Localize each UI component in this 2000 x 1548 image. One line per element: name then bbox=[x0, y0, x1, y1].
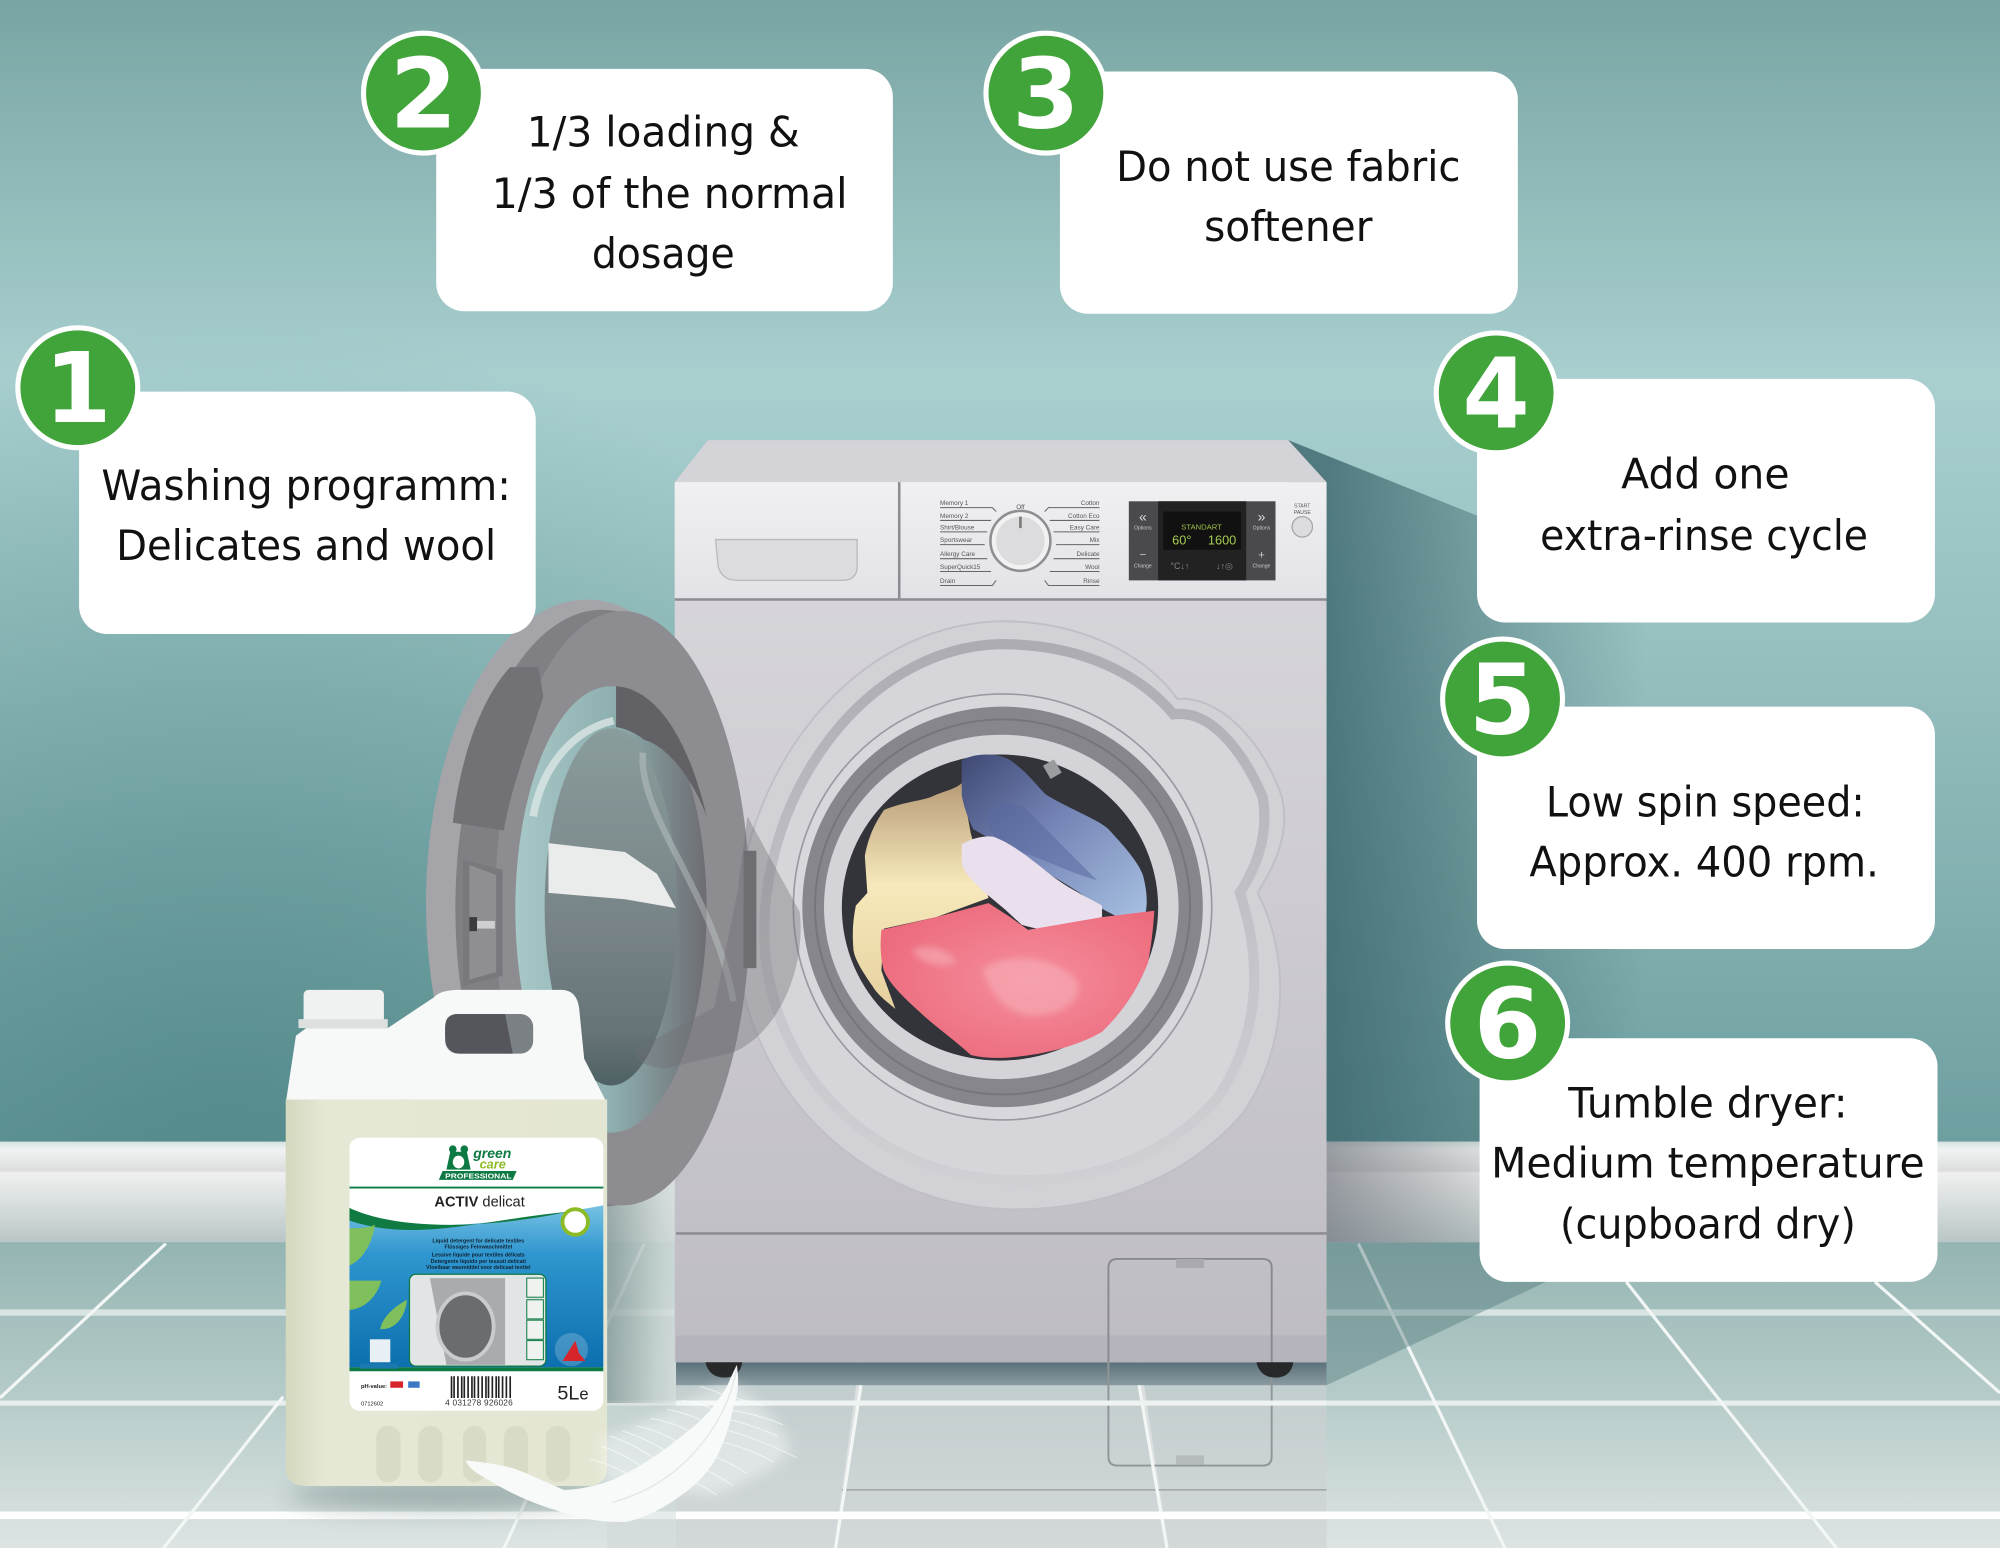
reflection column below door bbox=[607, 1173, 676, 1548]
barcode bbox=[445, 1376, 513, 1408]
feather bbox=[466, 1365, 797, 1522]
tiled floor bbox=[0, 1242, 2000, 1548]
washing machine bbox=[426, 440, 1327, 1548]
description lines: Vloeibaar wasmiddel voor delicaat textiel bbox=[426, 1265, 531, 1271]
programme labels left: Allergy Care bbox=[940, 551, 976, 558]
number badge: 1 bbox=[44, 332, 112, 445]
start pause button: START bbox=[1294, 504, 1310, 510]
description lines bbox=[426, 1238, 531, 1271]
text bbox=[1540, 450, 1868, 560]
jug body bbox=[286, 1100, 607, 1486]
description lines: Flüssiges Feinwaschmittel bbox=[444, 1245, 513, 1251]
machine shadow and reflection on floor bbox=[676, 1362, 1327, 1548]
product name: ACTIV delicat bbox=[434, 1195, 525, 1211]
description lines: Lessive liquide pour textiles délicats bbox=[432, 1252, 525, 1258]
number badge: 6 bbox=[1474, 967, 1541, 1080]
door hole bbox=[515, 686, 707, 1133]
blue garment fold bbox=[986, 803, 1097, 880]
brand mark bbox=[555, 1333, 588, 1366]
digital display: 60° bbox=[1172, 533, 1191, 548]
text: 1/3 loading & bbox=[527, 108, 800, 157]
service hatch bbox=[676, 1259, 1327, 1362]
callout 3: fabric softener bbox=[986, 33, 1518, 314]
programme labels left: SuperQuick15 bbox=[940, 564, 981, 571]
seal bbox=[562, 1209, 588, 1235]
text bbox=[492, 108, 848, 278]
embossed door surround bbox=[737, 621, 1284, 1209]
text: Add one bbox=[1621, 450, 1790, 499]
programme labels left: Memory 1 bbox=[940, 500, 969, 507]
leaves bbox=[349, 1225, 407, 1329]
cream garment bbox=[853, 783, 989, 1009]
lower recess with latch bbox=[463, 860, 503, 986]
text: Delicates and wool bbox=[116, 521, 496, 570]
digital display: ↓↑◎ bbox=[1216, 561, 1233, 571]
door glass bbox=[545, 728, 677, 1085]
brand logo: care bbox=[480, 1156, 506, 1171]
digital display: Options bbox=[1253, 525, 1271, 531]
programme labels left: Sportswear bbox=[940, 537, 973, 544]
text bbox=[101, 461, 511, 570]
start pause button bbox=[1292, 504, 1312, 537]
door bulge glass bbox=[636, 816, 801, 1069]
callout 6: tumble dryer bbox=[1448, 963, 1938, 1282]
text: softener bbox=[1204, 202, 1373, 251]
text: Do not use fabric bbox=[1116, 142, 1460, 191]
digital display: STANDART bbox=[1181, 522, 1222, 531]
skirting board bbox=[0, 1142, 2000, 1242]
programme labels left: Memory 2 bbox=[940, 513, 969, 520]
detergent drawer handle bbox=[716, 540, 857, 580]
article number: 0712602 bbox=[361, 1402, 383, 1408]
digital display: Change bbox=[1134, 564, 1152, 570]
garment highlights bbox=[912, 947, 1079, 1016]
jug shoulders and handle bbox=[286, 990, 607, 1103]
door back rim bbox=[426, 600, 747, 1207]
programme dial: Off bbox=[1016, 504, 1025, 511]
machine feet bbox=[705, 1362, 1293, 1378]
callout 2: loading and dosage bbox=[364, 33, 893, 311]
programme labels right: Mix bbox=[1090, 537, 1100, 544]
programme dial bbox=[990, 504, 1050, 571]
door latch strip bbox=[744, 851, 756, 968]
number badge bbox=[1436, 333, 1556, 453]
door front ring bbox=[455, 610, 749, 1207]
text: Low spin speed: bbox=[1546, 777, 1865, 826]
number badge: 3 bbox=[1012, 38, 1080, 151]
text: Tumble dryer: bbox=[1567, 1078, 1848, 1127]
brand logo: PROFESSIONAL bbox=[445, 1172, 512, 1181]
digital display: » bbox=[1258, 509, 1266, 525]
text: 1/3 of the normal bbox=[492, 169, 848, 218]
glass reflections bbox=[533, 721, 733, 1001]
programme labels right: Cotton bbox=[1081, 500, 1100, 507]
callout 1: washing programme bbox=[18, 328, 536, 634]
brand logo: green bbox=[472, 1145, 511, 1161]
control panel bbox=[675, 482, 1327, 600]
text: (cupboard dry) bbox=[1560, 1200, 1856, 1249]
blue label band bbox=[349, 1205, 603, 1367]
digital display: Change bbox=[1253, 564, 1271, 570]
door opening rings bbox=[793, 694, 1212, 1120]
barcode: 4 031278 926026 bbox=[445, 1398, 513, 1408]
jug cap bbox=[298, 990, 388, 1028]
text bbox=[1116, 142, 1460, 251]
open door bbox=[426, 600, 801, 1207]
programme labels right: Easy Care bbox=[1070, 524, 1100, 531]
pale pink garment bbox=[962, 836, 1102, 930]
wall shadow of washing machine bbox=[1288, 440, 1658, 1142]
number badge bbox=[18, 328, 138, 448]
digital display: °C↓↑ bbox=[1170, 561, 1189, 571]
programme labels right: Rinse bbox=[1083, 578, 1100, 585]
number badge: 4 bbox=[1462, 337, 1530, 450]
programme labels left: Drain bbox=[940, 578, 956, 585]
text: Medium temperature bbox=[1491, 1138, 1925, 1187]
callout 4: extra rinse bbox=[1436, 333, 1935, 622]
text: Washing programm: bbox=[101, 461, 511, 510]
description lines: Liquid detergent for delicate textiles bbox=[432, 1238, 524, 1244]
brand logo bbox=[439, 1145, 517, 1181]
detergent jug bbox=[286, 990, 607, 1510]
programme labels right: Cotton Eco bbox=[1068, 513, 1100, 520]
product label bbox=[349, 1138, 603, 1411]
handle hole bbox=[445, 1014, 533, 1054]
label photo of washer bbox=[409, 1274, 546, 1366]
text: Approx. 400 rpm. bbox=[1529, 837, 1879, 886]
text bbox=[1491, 1078, 1925, 1249]
pH value: pH-value: bbox=[361, 1384, 387, 1390]
number badge bbox=[364, 33, 483, 153]
blue garment bbox=[962, 754, 1147, 922]
description lines: Detergente liquido per tessuti delicati bbox=[431, 1259, 526, 1265]
programme labels left bbox=[940, 500, 996, 585]
number badge: 5 bbox=[1469, 643, 1536, 756]
start pause button: PAUSE bbox=[1294, 510, 1311, 516]
wall background bbox=[0, 0, 2000, 1143]
pH value bbox=[361, 1381, 420, 1390]
number badge: 2 bbox=[390, 38, 457, 151]
number badge bbox=[1443, 639, 1562, 759]
machine top bbox=[675, 440, 1327, 482]
digital display: + bbox=[1258, 550, 1265, 562]
text: extra-rinse cycle bbox=[1540, 511, 1868, 560]
programme labels right bbox=[1045, 500, 1100, 585]
callout 5: spin speed bbox=[1443, 639, 1935, 949]
upper recess bbox=[453, 667, 543, 830]
lower panel seam bbox=[676, 1232, 1327, 1234]
programme labels left: Shirt/Blouse bbox=[940, 524, 975, 531]
pink-red garment bbox=[881, 903, 1154, 1058]
text: dosage bbox=[592, 229, 735, 278]
number badge bbox=[986, 33, 1106, 153]
digital display: 1600 bbox=[1208, 533, 1236, 548]
digital display: − bbox=[1140, 550, 1147, 562]
number badge bbox=[1448, 963, 1568, 1083]
volume mark: 5Le bbox=[557, 1382, 589, 1404]
drum tag bbox=[1043, 759, 1062, 779]
programme labels right: Wool bbox=[1085, 564, 1099, 571]
digital display: Options bbox=[1134, 525, 1152, 531]
text bbox=[1529, 777, 1879, 886]
programme labels right: Delicate bbox=[1077, 551, 1100, 558]
machine body bbox=[675, 482, 1327, 1362]
digital display bbox=[1129, 501, 1276, 580]
ecolabel bbox=[360, 1339, 398, 1369]
jug bottom ribs bbox=[376, 1426, 570, 1482]
laundry in drum bbox=[853, 754, 1154, 1058]
digital display: « bbox=[1139, 509, 1147, 525]
